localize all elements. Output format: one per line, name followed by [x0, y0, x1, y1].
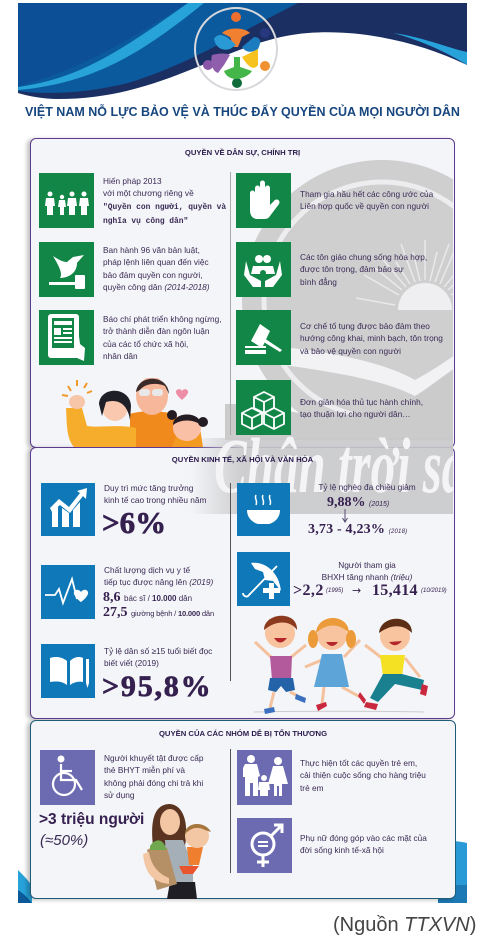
- text: economic growth: kinh tế cao trong nhiều năm: [104, 495, 206, 505]
- source note: (Nguồn TTXVN): [333, 914, 476, 936]
- text: legal documents: bảo đảm quyền con người,: [103, 270, 203, 280]
- text: conventions: [300, 189, 434, 211]
- logo: people circle: [194, 7, 278, 91]
- arrow: poverty decrease: [342, 509, 348, 523]
- text: procedures: Cơ chế tố tụng được bảo đảm theo: [300, 321, 430, 331]
- text: administrative procedures: Đơn giản hóa thủ tục hành chính,: [300, 397, 423, 407]
- text: press: Báo chí phát triển không ngừng,: [103, 314, 222, 324]
- text: press: [103, 314, 222, 361]
- text: constitution: "Quyền con người, quyền và: [103, 203, 226, 212]
- text: children's rights: cải thiện cuộc sống cho hàng triệu: [300, 770, 426, 780]
- stat: social insurance growth: 15,414: [372, 582, 418, 599]
- stat: social insurance growth: >2,2: [293, 582, 324, 599]
- icon: cubes: [236, 380, 291, 435]
- text: health services: Chất lượng dịch vụ y tế: [104, 565, 190, 575]
- stat: three million people: >3 triệu người: [39, 811, 144, 828]
- text: literacy: Tỷ lệ dân số ≥15 tuổi biết đọc: [104, 646, 212, 656]
- text: constitution: nghĩa vụ công dân": [103, 217, 188, 226]
- icon: hands and people: [236, 242, 291, 297]
- stat: social insurance growth: (10/2019): [421, 588, 447, 594]
- text: disabled people: sử dụng: [104, 790, 134, 800]
- text: legal documents: quyền công dân (2014-2018): [103, 282, 210, 292]
- icon: wheelchair: [40, 750, 95, 805]
- text: social insurance: [322, 560, 412, 582]
- text: religions: [300, 252, 427, 287]
- illustration: mother with child and groceries: [143, 804, 211, 899]
- text: multidimensional poverty: Tỷ lệ nghèo đa chiều giảm: [318, 482, 416, 492]
- text: disabled people: thẻ BHYT miễn phí và: [104, 765, 185, 775]
- stat: hospital beds: 27,5 giường bệnh / 10.000 dân: [103, 605, 214, 620]
- panel: economic, social and cultural rights: [30, 447, 455, 719]
- banner: [18, 3, 467, 99]
- stat: 2018 poverty rate: 3,73 - 4,23% (2018): [308, 522, 407, 537]
- stat: doctors: 8,6 bác sĩ / 10.000 dân: [103, 590, 192, 605]
- icon: open book: [41, 644, 95, 698]
- icon: bowl: [237, 483, 290, 536]
- stat: social insurance growth: (1995): [326, 588, 343, 594]
- text: disabled people: [104, 753, 204, 800]
- text: health services: tiếp tục được nâng lên (2019): [104, 577, 213, 587]
- icon: gender equality: [237, 818, 292, 873]
- text: economic growth: Duy trì mức tăng trưởng: [104, 483, 193, 493]
- text: social insurance: Người tham gia: [338, 560, 396, 570]
- text: disabled people: Người khuyết tật được cấp: [104, 753, 203, 763]
- icon: dove and gavel: [39, 242, 94, 297]
- text: religions: bình đẳng: [300, 277, 337, 287]
- text: women's contributions: [300, 833, 427, 855]
- panel: civil and political rights: [30, 138, 455, 448]
- text: procedures: [300, 321, 443, 356]
- panel: rights of vulnerable groups: [30, 720, 456, 899]
- illustration: children jumping: [254, 616, 428, 714]
- stat: approx 50 percent: (≈50%): [40, 832, 88, 849]
- text: literacy: [104, 646, 212, 668]
- text: children's rights: [300, 758, 426, 793]
- text: administrative procedures: tạo thuận lợi cho người dân…: [300, 409, 411, 419]
- icon: raised hand: [236, 173, 291, 228]
- text: children's rights: trẻ em: [300, 783, 324, 793]
- text: legal documents: Ban hành 96 văn bản luật,: [103, 245, 200, 255]
- text: conventions: Liên hợp quốc về quyền con người: [300, 201, 429, 211]
- text: legal documents: pháp lệnh liên quan đến việc: [103, 257, 209, 267]
- text: procedures: hướng công khai, minh bạch, tôn trọng: [300, 333, 443, 343]
- text: disabled people: không phải đóng chi trả khi: [104, 778, 203, 788]
- icon: family with parents: [237, 750, 292, 805]
- text: press: trở thành diễn đàn ngôn luận: [103, 326, 209, 336]
- text: health services: [104, 565, 213, 587]
- heading: section 1: QUYỀN VỀ DÂN SỰ, CHÍNH TRỊ: [185, 148, 300, 157]
- heading: section 3: QUYỀN CỦA CÁC NHÓM DỄ BỊ TỔN THƯƠNG: [159, 729, 327, 738]
- text: administrative procedures: [300, 397, 423, 419]
- text: religions: Các tôn giáo chung sống hòa hợp,: [300, 252, 427, 262]
- text: constitution: với một chương riêng về: [103, 188, 194, 198]
- watermark: [194, 160, 453, 514]
- text: economic growth: [104, 483, 206, 505]
- text: women's contributions: đời sống kinh tế-xã hội: [300, 845, 384, 855]
- stat: literacy rate: >95,8%: [102, 670, 212, 703]
- text: children's rights: Thực hiện tốt các quyền trẻ em,: [300, 758, 417, 768]
- illustration: family: [62, 378, 208, 447]
- stat: 2015 poverty rate: 9,88% (2015): [327, 495, 389, 510]
- text: procedures: và bảo vệ quyền con người: [300, 346, 401, 356]
- text: conventions: Tham gia hầu hết các công ước của: [300, 189, 433, 199]
- icon: umbrella: [237, 552, 290, 606]
- stat: social insurance growth: [293, 582, 447, 599]
- heading: section 2: QUYỀN KINH TẾ, XÃ HỘI VÀ VĂN HÓA: [172, 455, 313, 464]
- text: constitution: Hiến pháp 2013: [103, 176, 162, 186]
- text: social insurance: BHXH tăng nhanh (triệu): [322, 572, 412, 582]
- icon: heartbeat: [41, 565, 95, 619]
- text: press: nhân dân: [103, 351, 138, 361]
- icon: growth chart: [41, 483, 95, 536]
- text: religions: được tôn trọng, đảm bảo sự: [300, 264, 404, 274]
- text: constitution: [103, 176, 226, 226]
- stat: growth above 6 percent: >6%: [102, 505, 166, 540]
- bottom wave: [18, 841, 467, 903]
- text: literacy: biết viết (2019): [104, 658, 159, 668]
- icon: family: [39, 173, 94, 228]
- title: VIỆT NAM NỖ LỰC BẢO VỆ VÀ THÚC ĐẨY QUYỀN CỦA MỌI NGƯỜI DÂN: [25, 105, 460, 119]
- icon: newspaper: [39, 310, 94, 365]
- text: women's contributions: Phụ nữ đóng góp vào các mặt của: [300, 833, 427, 843]
- stat: social insurance growth: →: [352, 584, 362, 597]
- text: legal documents: [103, 245, 210, 292]
- icon: gavel: [236, 310, 291, 365]
- text: press: của các tổ chức xã hội,: [103, 339, 188, 349]
